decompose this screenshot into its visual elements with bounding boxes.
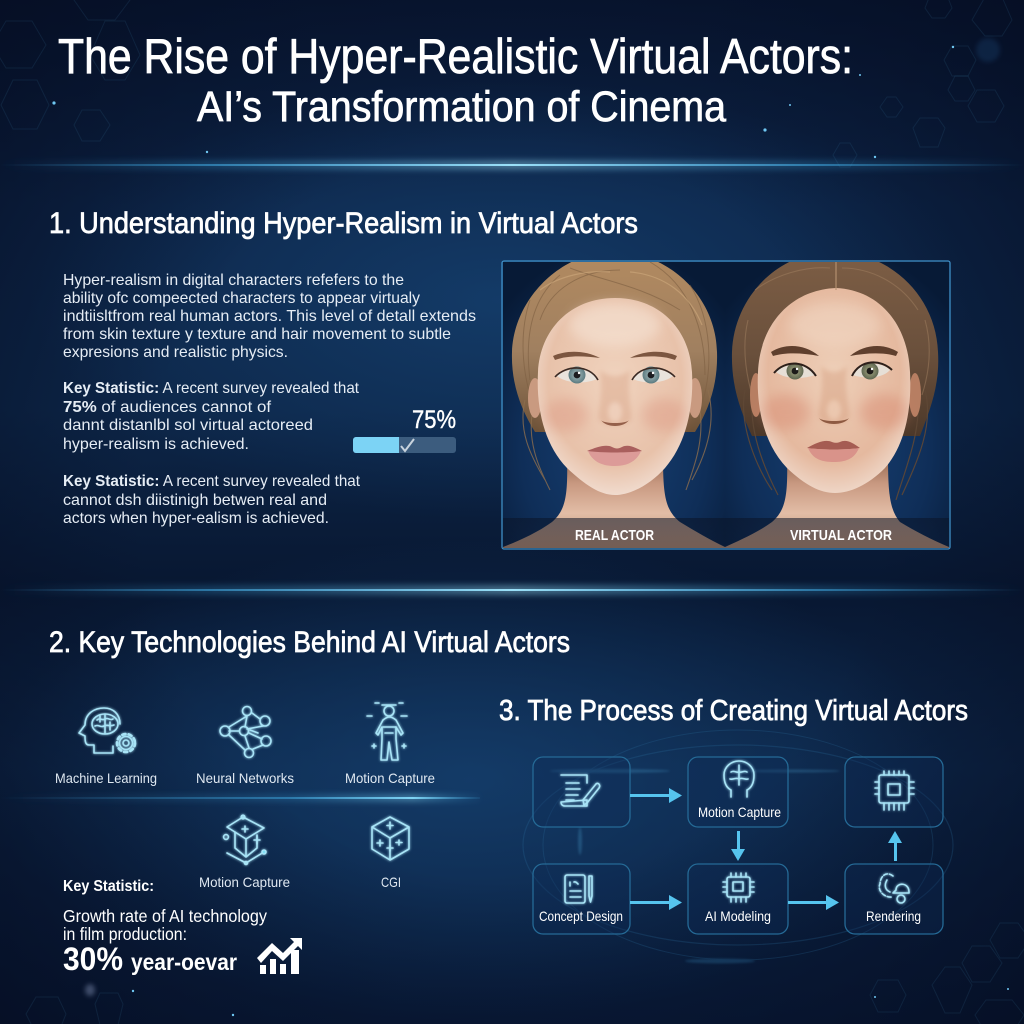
- title: AI’s Transformation of Cinema: [197, 83, 726, 131]
- flow step: AI modeling: AI Modeling: [705, 908, 771, 924]
- title: The Rise of Hyper-Realistic Virtual Actors:: [58, 30, 853, 84]
- heading: section 1: 1. Understanding Hyper-Realism in Virtual Actors: [49, 207, 638, 240]
- flow step: motion capture: Motion Capture: [698, 804, 781, 820]
- label band: real actor: REAL ACTOR: [575, 527, 654, 544]
- flow step: script: [533, 757, 630, 827]
- divider glow: technologies: [0, 794, 480, 802]
- text block: key statistic one: Key Statistic: A recent survey revealed that: [63, 380, 360, 397]
- panel: real vs virtual actor portraits: [502, 252, 950, 549]
- label band: real actor: [503, 518, 725, 548]
- flow step: concept design: [533, 864, 630, 934]
- arrow: rendering to chip: [888, 831, 902, 861]
- text block: key statistic two: actors when hyper-ealism is achieved.: [63, 510, 329, 527]
- flow step: concept design: Concept Design: [539, 908, 623, 924]
- label: machine learning: Machine Learning: [55, 770, 157, 786]
- text block: hyper-realism definition: Hyper-realism in digital characters refefers to the: [63, 272, 404, 289]
- text block: growth statistic: in film production:: [63, 924, 187, 944]
- icon: 3D capture box: [224, 815, 266, 864]
- text block: hyper-realism definition: [63, 272, 476, 361]
- text block: growth statistic: 30%: [63, 941, 123, 977]
- label: CGI: CGI: [381, 874, 401, 890]
- text block: growth statistic: [63, 878, 267, 977]
- icon: growth chart: [257, 938, 302, 974]
- label band: virtual actor: [725, 518, 949, 548]
- progress bar: 75%: [353, 406, 456, 453]
- flow step: AI modeling: [688, 864, 788, 934]
- label band: virtual actor: VIRTUAL ACTOR: [790, 527, 892, 544]
- divider glow: middle: [0, 585, 1024, 595]
- text block: hyper-realism definition: indtiisltfrom real human actors. This level of detall extends: [63, 308, 476, 325]
- icon: motion capture figure: [367, 703, 407, 760]
- arrow: motion capture to AI modeling: [731, 831, 745, 861]
- flow step: rendering: [845, 864, 943, 934]
- portrait: virtual actor: [725, 252, 949, 549]
- text block: hyper-realism definition: ability ofc compeected characters to appear virtualy: [63, 290, 420, 307]
- icon: CGI cube: [372, 817, 409, 860]
- heading: section 2: 2. Key Technologies Behind AI Virtual Actors: [49, 626, 570, 659]
- icon: small chip: [723, 873, 754, 902]
- text block: key statistic one: hyper-realism is achieved.: [63, 436, 249, 453]
- arrow: script to motion capture: [630, 788, 682, 803]
- icon: brain head: [724, 761, 754, 797]
- text block: growth statistic: year-oevar: [131, 949, 237, 975]
- text block: key statistic one: dannt distanlbl sol virtual actoreed: [63, 417, 313, 434]
- progress bar: 75%: 75%: [412, 406, 456, 434]
- label: motion capture second: Motion Capture: [199, 874, 290, 890]
- flow step: motion capture: [688, 757, 788, 827]
- flow step: rendering: Rendering: [866, 908, 921, 924]
- text block: key statistic two: [63, 473, 361, 527]
- text block: growth statistic: Growth rate of AI technology: [63, 906, 267, 926]
- text block: key statistic one: 75% of audiences cannot of: [63, 399, 272, 416]
- icon: processor chip: [875, 771, 914, 810]
- icon: machine learning: [79, 708, 135, 753]
- icon: rendering sphere and helmet: [879, 874, 909, 903]
- text block: growth statistic: Key Statistic:: [63, 878, 154, 895]
- arrow: AI modeling to rendering: [788, 895, 839, 910]
- label: neural networks: Neural Networks: [196, 770, 294, 786]
- label: motion capture: Motion Capture: [345, 770, 435, 786]
- heading: section 3: 3. The Process of Creating Virtual Actors: [499, 695, 968, 727]
- icon: document and pencil: [561, 775, 600, 806]
- icon: sketch sheet and pen: [565, 875, 592, 903]
- divider glow: header: [0, 160, 1024, 170]
- decorative flow backdrop: [523, 730, 953, 964]
- icon: neural networks: [220, 706, 271, 758]
- text block: key statistic one: [63, 380, 360, 453]
- title: [58, 30, 853, 131]
- text block: hyper-realism definition: from skin texture y texture and hair movement to subtle: [63, 326, 451, 343]
- text block: hyper-realism definition: expresions and realistic physics.: [63, 344, 288, 361]
- flow step: chip: [845, 757, 943, 827]
- portrait: real actor: [503, 252, 725, 549]
- text block: key statistic two: cannot dsh diistinigh betwen real and: [63, 492, 327, 509]
- arrow: concept design to AI modeling: [630, 895, 682, 910]
- text block: key statistic two: Key Statistic: A recent survey revealed that: [63, 473, 361, 490]
